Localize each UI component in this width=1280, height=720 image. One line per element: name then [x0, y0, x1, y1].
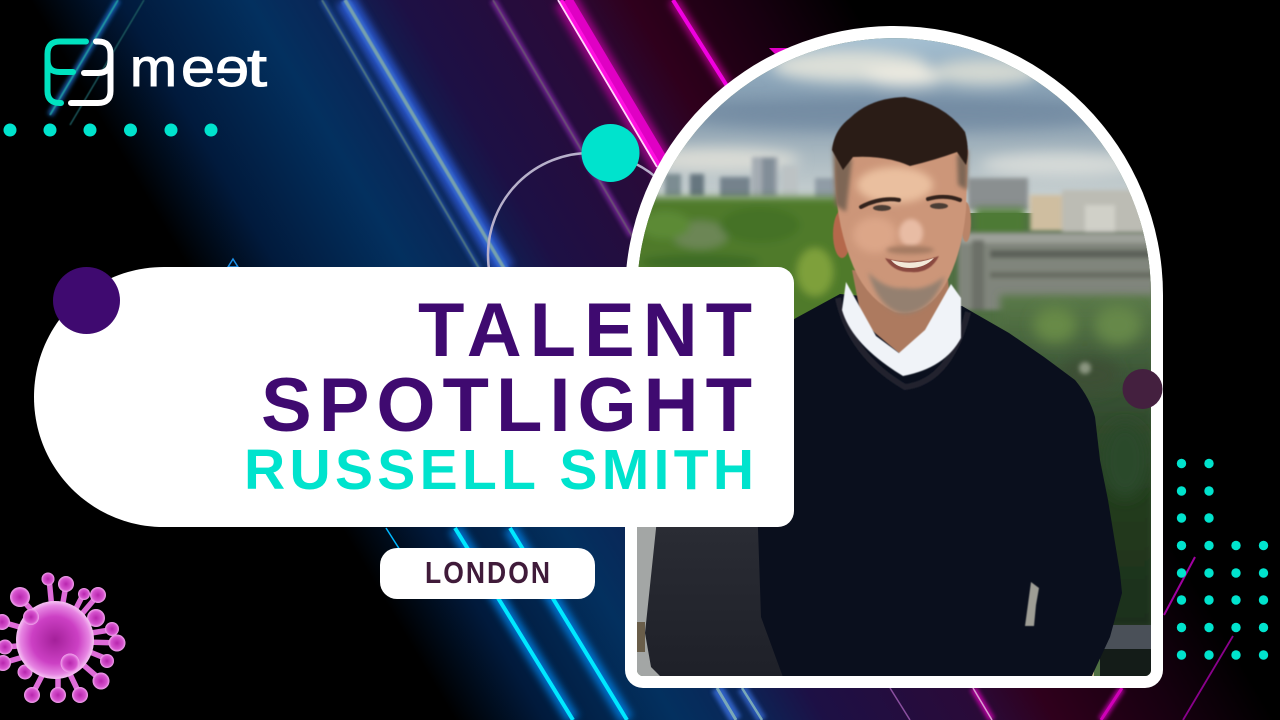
virus body [16, 601, 94, 679]
logo icon white half [71, 42, 110, 103]
logo: meet [48, 38, 267, 103]
purple streak [493, 0, 632, 236]
dots grid: bottom right [1177, 459, 1268, 660]
sweater collar band [838, 298, 968, 387]
location pill [380, 548, 595, 599]
side fade [833, 145, 852, 212]
forehead highlight [857, 167, 933, 203]
photo sky [637, 38, 1151, 213]
photo: Russell Smith portrait [630, 38, 1155, 680]
photo base fill [637, 38, 1151, 678]
blue streak [322, 0, 505, 270]
virus surface knobs [23, 609, 39, 625]
panel: white title pill [34, 267, 794, 527]
photo grey building [958, 232, 1153, 310]
logo icon teal half [48, 42, 86, 103]
photo frame: white arch [625, 26, 1163, 688]
logo wordmark [130, 38, 267, 98]
photo railing right [1092, 625, 1151, 676]
magenta streaks [558, 0, 788, 174]
hair [832, 97, 968, 170]
sweater left sleeve [645, 527, 782, 676]
icon: virus [0, 572, 126, 703]
dark plum circle accent [1122, 369, 1162, 409]
eyes [873, 203, 948, 211]
location text: LONDON [425, 556, 550, 590]
heading: TALENT: TALENT [418, 288, 752, 373]
right ear [961, 202, 971, 242]
cyan streaks [228, 259, 627, 720]
face [835, 150, 968, 312]
photo trees left [638, 190, 1030, 319]
teal circle accent [582, 124, 640, 182]
sweater torso and right arm [758, 294, 1122, 676]
logo wordmark: m [130, 38, 177, 98]
photo skyline [665, 157, 1152, 235]
purple circle accent [53, 267, 120, 334]
top-left teal streaks [50, 0, 144, 125]
logo wordmark: t [247, 38, 267, 98]
bottom streaks below the frame [717, 557, 1233, 720]
virus spike stems [2, 578, 120, 695]
moustache shadow [886, 246, 934, 254]
eyebrows [861, 197, 960, 207]
gap between torso and right arm [1025, 582, 1039, 626]
decorative arc [488, 153, 692, 357]
shirt collar [842, 282, 961, 376]
smile [885, 256, 939, 272]
nose [899, 219, 923, 247]
name: RUSSELL SMITH: RUSSELL SMITH [244, 438, 754, 502]
heading: SPOTLIGHT: SPOTLIGHT [261, 363, 752, 448]
dots row: top left [4, 124, 218, 136]
stubble shadow [868, 272, 945, 314]
neck [852, 270, 952, 354]
photo clouds [640, 50, 1140, 177]
logo wordmark: e [215, 38, 249, 98]
virus spike heads [0, 572, 126, 703]
logo wordmark: e [181, 38, 215, 98]
cheek highlight [853, 217, 897, 253]
left ear [832, 212, 848, 258]
photo lower-left wall [637, 527, 660, 676]
photo trees right [1000, 295, 1155, 630]
